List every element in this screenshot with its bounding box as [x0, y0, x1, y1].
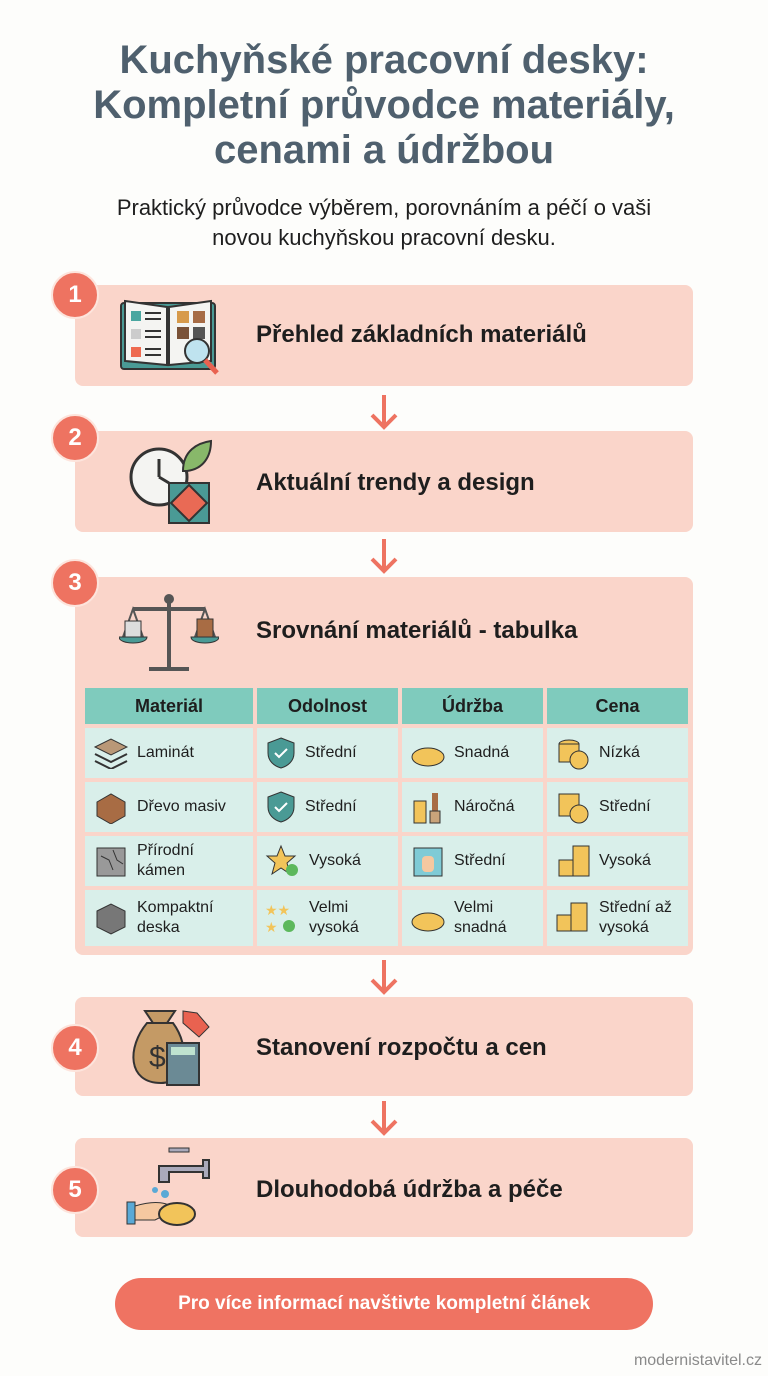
panel: step 2 — [75, 431, 693, 532]
comparison table: Cena — [595, 696, 640, 716]
subtitle: Praktický průvodce výběrem, porovnáním a péčí o vaši — [117, 195, 651, 220]
title — [93, 38, 675, 172]
badge 3 — [51, 559, 99, 607]
badge 5 — [51, 1166, 99, 1214]
badge 3: 3 — [68, 569, 82, 596]
icon: scales — [119, 594, 219, 671]
comparison table: vysoká — [309, 919, 359, 936]
panel: step 3 — [75, 577, 693, 955]
comparison table: deska — [137, 919, 180, 936]
arrow 3 — [370, 960, 398, 995]
comparison table: Střední až — [599, 899, 672, 916]
heading: Aktuální trendy a design — [256, 469, 535, 496]
comparison table: Střední — [305, 798, 357, 815]
arrow 1 — [370, 395, 398, 430]
comparison table: Nízká — [599, 744, 640, 761]
comparison table: Vysoká — [309, 852, 361, 869]
title: Kuchyňské pracovní desky: — [119, 38, 649, 82]
comparison table: snadná — [454, 919, 506, 936]
comparison table: Střední — [305, 744, 357, 761]
comparison table: kámen — [137, 862, 185, 879]
panel: step 1 — [75, 285, 693, 386]
badge 1: 1 — [68, 281, 82, 308]
comparison table: Vysoká — [599, 852, 651, 869]
comparison table: Střední — [599, 798, 651, 815]
call to action button — [115, 1278, 653, 1330]
panel: step 4 — [75, 997, 693, 1096]
comparison table: Kompaktní — [137, 899, 213, 916]
comparison table: Přírodní — [137, 842, 194, 859]
title: Kompletní průvodce materiály, — [93, 83, 675, 127]
badge 2 — [51, 414, 99, 462]
heading: Srovnání materiálů - tabulka — [256, 617, 577, 644]
badge 4: 4 — [68, 1034, 82, 1061]
heading: Přehled základních materiálů — [256, 321, 587, 348]
comparison table: Laminát — [137, 744, 194, 761]
arrow 2 — [370, 539, 398, 574]
panel: step 5 — [75, 1138, 693, 1237]
comparison table: Snadná — [454, 744, 509, 761]
call to action button: Pro více informací navštivte kompletní článek — [178, 1293, 590, 1314]
comparison table: Materiál — [135, 696, 203, 716]
arrow 4 — [370, 1101, 398, 1136]
icon: catalog book — [120, 300, 219, 375]
comparison table: Náročná — [454, 798, 514, 815]
comparison table: Střední — [454, 852, 506, 869]
comparison table: ★ — [265, 919, 278, 935]
badge 5: 5 — [68, 1176, 82, 1203]
badge 4 — [51, 1024, 99, 1072]
badge 2: 2 — [68, 424, 82, 451]
icon: money bag and calculator: $ — [149, 1041, 166, 1074]
subtitle — [117, 195, 651, 250]
footer: source: modernistavitel.cz — [634, 1352, 762, 1369]
comparison table: Údržba — [442, 696, 503, 716]
icon: money bag and calculator — [132, 1010, 210, 1086]
badge 1 — [51, 271, 99, 319]
icon: clock and tile — [130, 440, 212, 524]
subtitle: novou kuchyňskou pracovní desku. — [212, 225, 556, 250]
comparison table: Dřevo masiv — [137, 798, 226, 815]
heading: Stanovení rozpočtu a cen — [256, 1034, 547, 1061]
comparison table — [85, 688, 688, 946]
comparison table: vysoká — [599, 919, 649, 936]
comparison table: Velmi — [454, 899, 493, 916]
heading: Dlouhodobá údržba a péče — [256, 1176, 563, 1203]
title: cenami a údržbou — [214, 128, 554, 172]
comparison table: Odolnost — [288, 696, 367, 716]
comparison table: ★★ — [265, 902, 290, 918]
comparison table: Velmi — [309, 899, 348, 916]
icon: faucet, hand and sponge — [126, 1148, 210, 1226]
